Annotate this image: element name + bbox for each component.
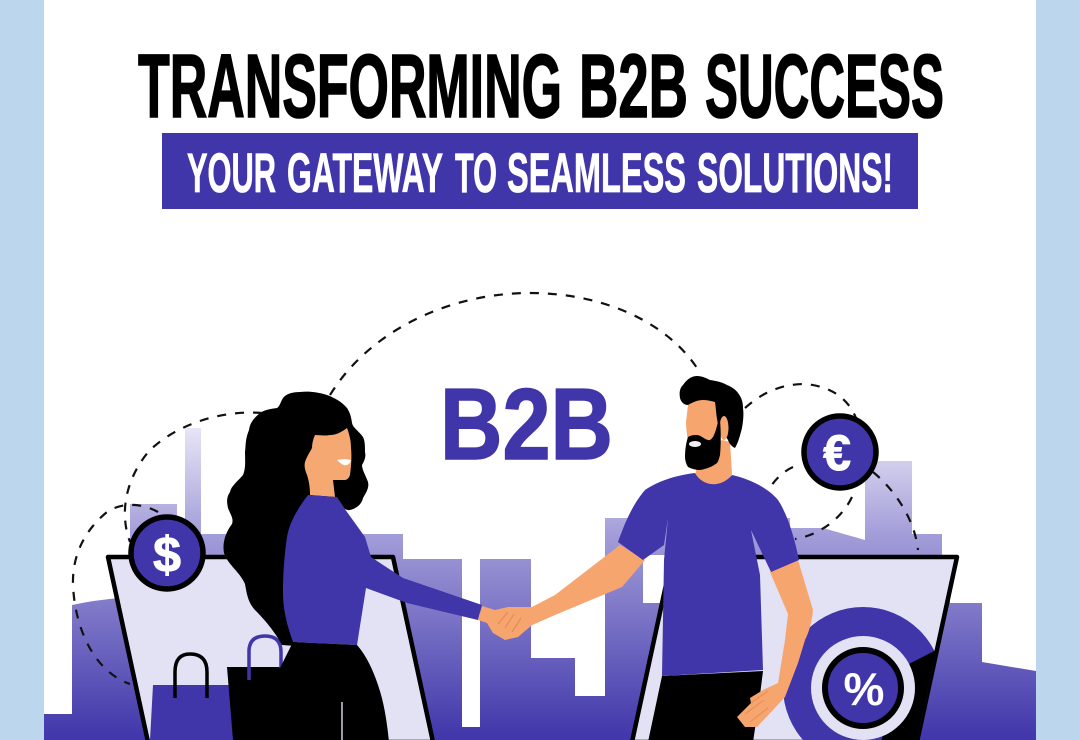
skyline window gap bbox=[643, 555, 665, 603]
left tablet bbox=[108, 557, 433, 740]
extended arm bbox=[530, 545, 645, 626]
face bbox=[686, 400, 718, 442]
B2B label: B2B bbox=[440, 369, 613, 481]
city skyline bbox=[44, 428, 1036, 740]
face bbox=[305, 428, 351, 497]
hair bbox=[680, 376, 743, 448]
trousers bbox=[278, 642, 389, 740]
subtitle banner: GATEWAY bbox=[287, 141, 443, 204]
percent donut chart bbox=[783, 607, 943, 740]
subtitle banner: TO bbox=[455, 141, 497, 204]
subtitle banner: SOLUTIONS! bbox=[697, 141, 893, 204]
dashed connection arcs bbox=[73, 293, 918, 684]
percent donut chart: % bbox=[844, 663, 884, 715]
handshake bbox=[478, 606, 532, 640]
beard bbox=[685, 420, 721, 470]
dollar coin bbox=[131, 517, 203, 589]
smile bbox=[337, 459, 351, 465]
other arm and hand bbox=[737, 560, 813, 727]
shopping bag blue bbox=[150, 654, 236, 740]
finger lines bbox=[745, 691, 768, 722]
subtitle banner: YOUR bbox=[187, 141, 276, 204]
euro coin: € bbox=[823, 425, 851, 481]
mouth bbox=[689, 441, 701, 447]
subtitle banner bbox=[162, 133, 918, 209]
euro coin bbox=[804, 416, 876, 488]
trouser crease bbox=[341, 702, 343, 740]
title: B2B bbox=[579, 37, 688, 137]
right tablet bbox=[632, 557, 957, 740]
ear bbox=[720, 416, 728, 440]
neck bbox=[695, 440, 732, 485]
woman bbox=[223, 392, 482, 740]
hair bbox=[223, 392, 368, 646]
subtitle banner: SEAMLESS bbox=[507, 141, 686, 204]
dollar coin: $ bbox=[153, 527, 181, 583]
man bbox=[530, 376, 813, 740]
shopping bag black bbox=[227, 636, 285, 740]
title: TRANSFORMING bbox=[138, 37, 562, 137]
sweater bbox=[283, 495, 482, 645]
trousers bbox=[648, 671, 763, 740]
t-shirt bbox=[618, 473, 799, 676]
